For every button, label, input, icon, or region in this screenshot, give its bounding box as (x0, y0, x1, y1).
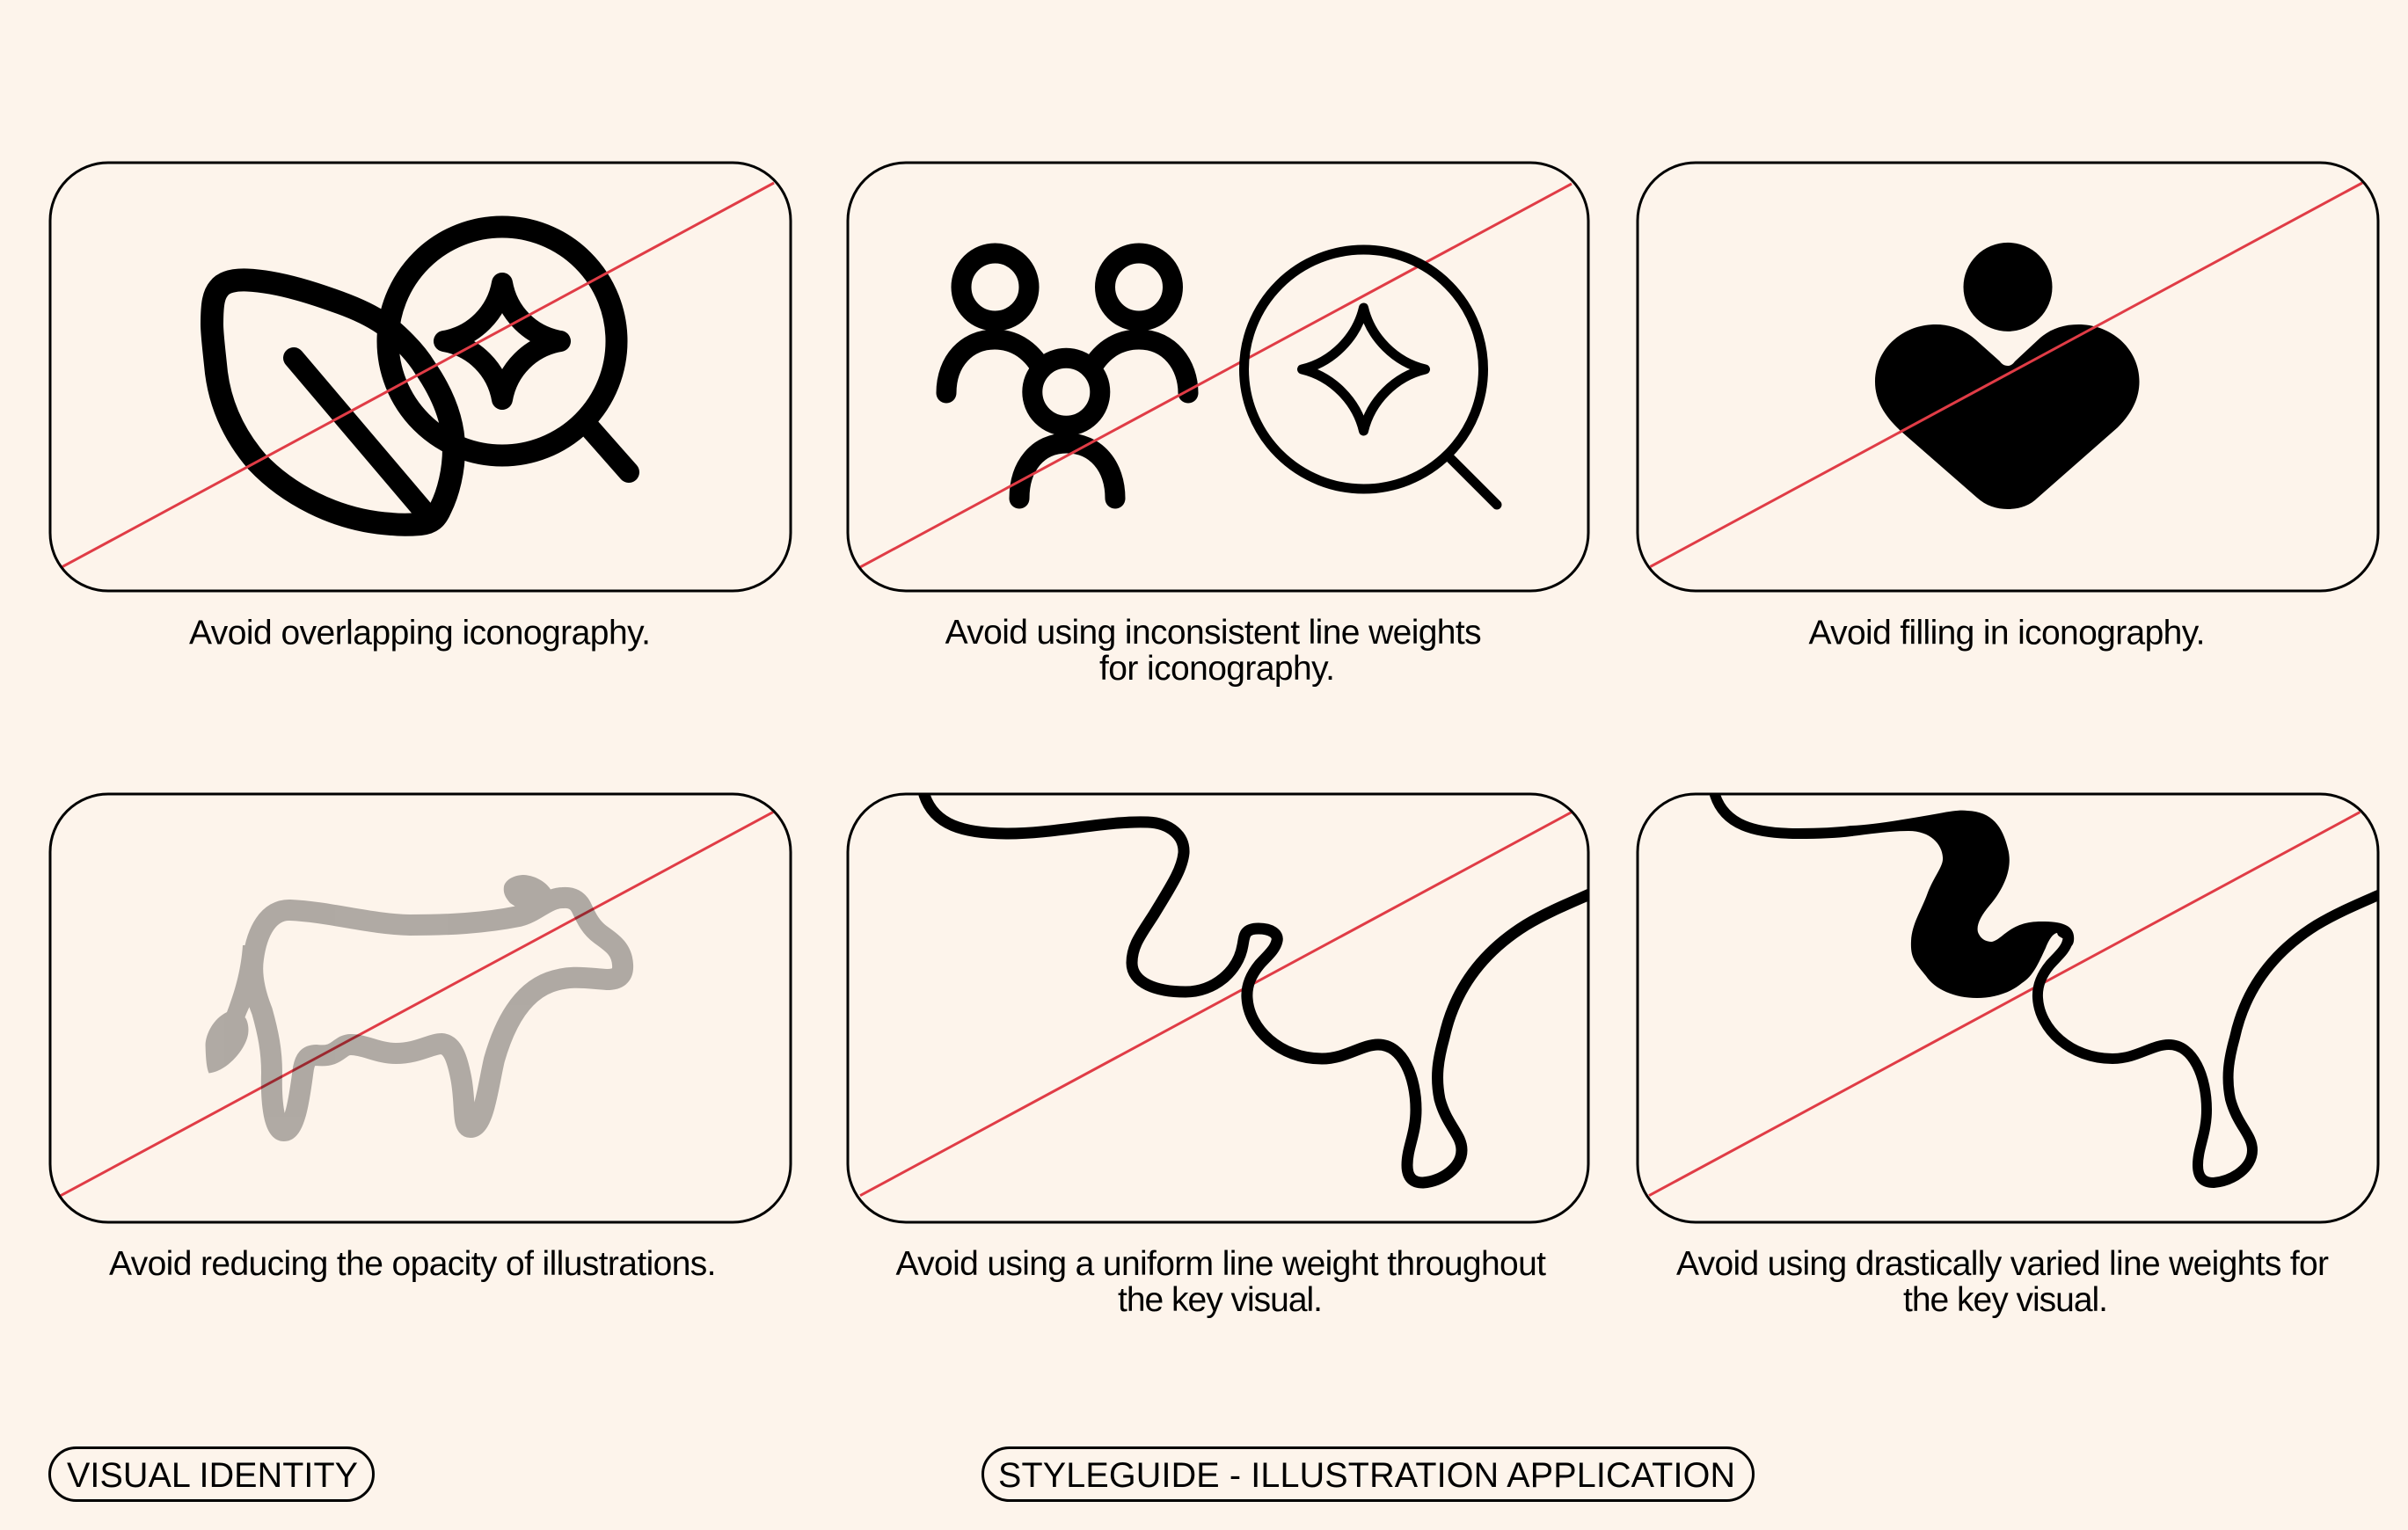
panel: avoid inconsistent line weights: for iconography. (1099, 650, 1335, 688)
icon: filled heart person (1875, 243, 2139, 509)
panel: avoid inconsistent line weights (848, 163, 1588, 688)
panel: avoid filling in iconography (1638, 163, 2378, 652)
icon: overlapping leaf and magnifier (212, 227, 629, 525)
caption: line weights: Avoid using inconsistent line weights (945, 614, 1482, 652)
footer pill: styleguide title: STYLEGUIDE - ILLUSTRATION APPLICATION (998, 1456, 1735, 1495)
panel: avoid uniform line weight (848, 794, 1594, 1319)
icon: thin magnifier with sparkle (1244, 250, 1497, 505)
illustration: uniform weight squiggle (924, 795, 1594, 1183)
panel: avoid uniform line weight: the key visual. (1118, 1281, 1323, 1319)
caption: overlapping: Avoid overlapping iconography. (189, 614, 651, 652)
panel: avoid overlapping iconography (50, 163, 791, 652)
footer pill: visual identity (49, 1447, 373, 1500)
icon: group of three people (946, 253, 1188, 499)
illustration: varied weight squiggle (1715, 795, 2384, 1183)
footer pill: visual identity: VISUAL IDENTITY (67, 1456, 358, 1495)
panel: avoid drastically varied line weights: the key visual. (1903, 1281, 2108, 1319)
caption: uniform: Avoid using a uniform line weight throughout (895, 1245, 1546, 1283)
illustration: low opacity cow (206, 875, 623, 1131)
panel: avoid drastically varied line weights (1638, 794, 2384, 1319)
caption: opacity: Avoid reducing the opacity of illustrations. (109, 1245, 716, 1283)
caption: filling: Avoid filling in iconography. (1808, 614, 2206, 652)
panel: avoid reducing opacity (50, 794, 791, 1283)
caption: varied: Avoid using drastically varied line weights for (1676, 1245, 2329, 1283)
